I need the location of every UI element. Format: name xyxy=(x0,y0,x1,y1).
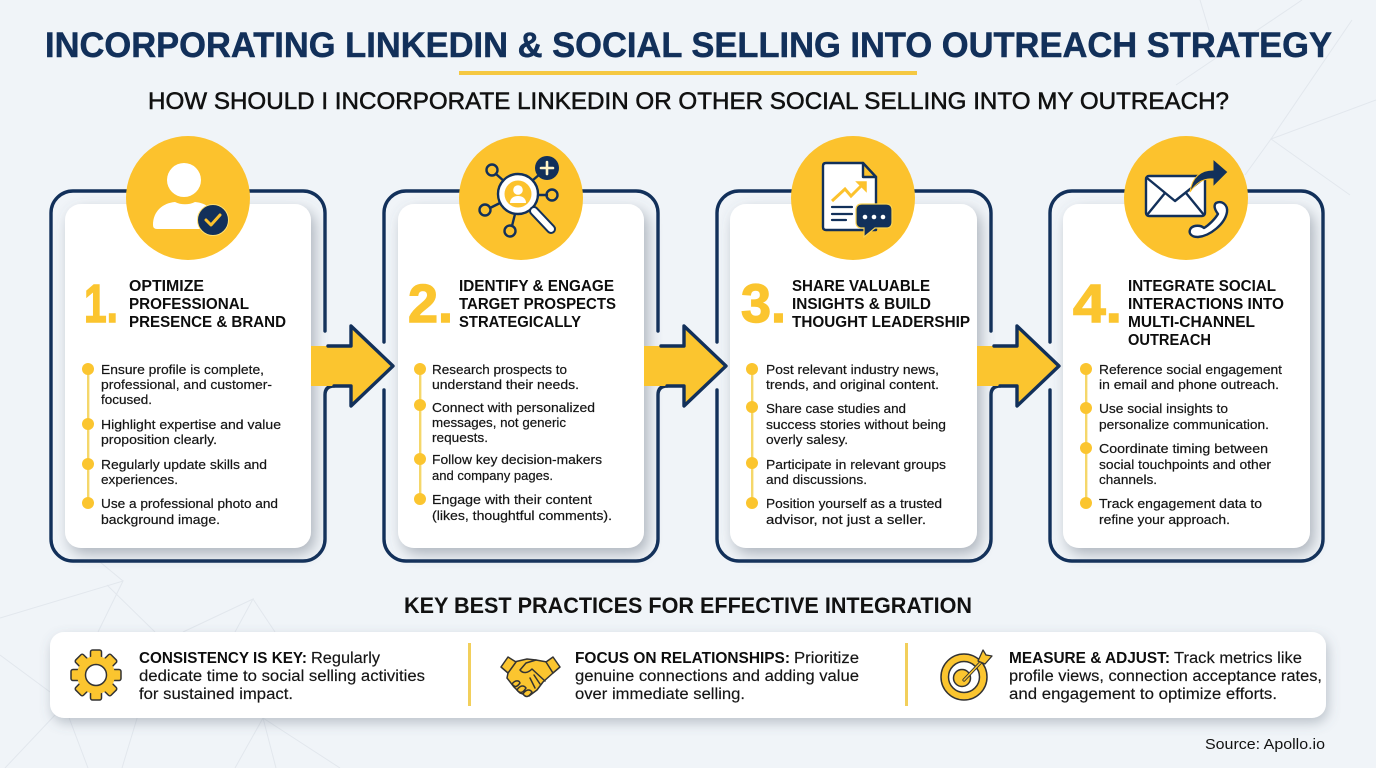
bullets 4: personalize communication. xyxy=(1099,417,1269,432)
bullets 4: Track engagement data to xyxy=(1099,496,1262,511)
practice 1 text: dedicate time to social selling activities xyxy=(139,668,425,685)
number 3: 3. xyxy=(741,274,786,334)
bullets 2: (likes, thoughtful comments). xyxy=(432,508,612,523)
bullets 1: background image. xyxy=(101,512,220,527)
divider 2 xyxy=(905,643,908,706)
practice 3 text: Track metrics like xyxy=(1174,650,1302,667)
bullets 1: Highlight expertise and value xyxy=(101,417,281,432)
practice 1 text xyxy=(139,650,425,703)
bullets 3 xyxy=(766,362,946,527)
bullets 2: understand their needs. xyxy=(432,377,579,392)
icon: target with dart xyxy=(941,650,992,700)
bullets 3: Post relevant industry news, xyxy=(766,362,939,377)
number 4: 4. xyxy=(1073,274,1122,334)
heading 2: IDENTIFY & ENGAGE xyxy=(459,278,614,295)
section heading: best practices: KEY BEST PRACTICES FOR EFFECTIVE INTEGRATION xyxy=(404,593,972,618)
step 1 card xyxy=(65,204,311,548)
title: INCORPORATING LINKEDIN & SOCIAL SELLING INTO OUTREACH STRATEGY xyxy=(45,25,1332,65)
bullet timeline 1 xyxy=(82,363,94,509)
practice 2 text xyxy=(575,650,859,703)
heading 4: MULTI-CHANNEL xyxy=(1128,314,1255,331)
practice 3 text: MEASURE & ADJUST: xyxy=(1009,650,1170,667)
icon: gear xyxy=(71,650,121,700)
panel: step 2 identify prospects xyxy=(384,136,726,561)
panel: step 4 integrate social xyxy=(1050,136,1323,561)
step 2 card xyxy=(398,204,644,548)
practice 1 text: CONSISTENCY IS KEY: xyxy=(139,650,307,667)
bullets 3: advisor, not just a seller. xyxy=(766,512,926,527)
heading 4 xyxy=(1128,278,1284,349)
bullets 2: and company pages. xyxy=(432,468,553,483)
bullets 4 xyxy=(1099,362,1282,527)
bullet timeline 4 xyxy=(1080,363,1092,509)
number 2: 2. xyxy=(408,274,453,334)
heading 2 xyxy=(459,278,616,331)
practice 3 text: profile views, connection acceptance rates, xyxy=(1009,668,1322,685)
practice 2 text: genuine connections and adding value xyxy=(575,668,859,685)
bullet timeline 2 xyxy=(414,363,426,505)
bullets 2: Follow key decision-makers xyxy=(432,452,602,467)
bullets 3: Position yourself as a trusted xyxy=(766,496,942,511)
bullets 4: in email and phone outreach. xyxy=(1099,377,1279,392)
bullets 1: Ensure profile is complete, xyxy=(101,362,264,377)
arrow: step 1 to 2 xyxy=(311,326,393,406)
bullets 4: channels. xyxy=(1099,472,1157,487)
bullets 3: Participate in relevant groups xyxy=(766,457,946,472)
arrow: step 2 to 3 xyxy=(644,326,726,406)
heading 4: INTERACTIONS INTO xyxy=(1128,296,1284,313)
number 1: 1. xyxy=(84,274,118,334)
step 1 frame xyxy=(51,191,334,561)
step 4 frame xyxy=(1050,191,1323,561)
practice 3 text xyxy=(1009,650,1322,703)
bullets 3: overly salesy. xyxy=(766,432,848,447)
subtitle question: HOW SHOULD I INCORPORATE LINKEDIN OR OTHER SOCIAL SELLING INTO MY OUTREACH? xyxy=(148,88,1229,115)
practice 2 text: FOCUS ON RELATIONSHIPS: xyxy=(575,650,790,667)
bullets 2: requests. xyxy=(432,430,488,445)
bullets 3: trends, and original content. xyxy=(766,377,939,392)
bullets 4: social touchpoints and other xyxy=(1099,457,1272,472)
step 3 frame xyxy=(717,191,1000,561)
heading 1 xyxy=(129,278,286,331)
step 4 card xyxy=(1063,204,1310,548)
bullet timeline 3 xyxy=(746,363,758,509)
heading 3: INSIGHTS & BUILD xyxy=(792,296,931,313)
bullets 2: Engage with their content xyxy=(432,492,592,507)
practice 2 text: Prioritize xyxy=(794,650,859,667)
bullets 2: messages, not generic xyxy=(432,415,566,430)
icon: prospect search network xyxy=(459,136,583,260)
practice 3 text: and engagement to optimize efforts. xyxy=(1009,686,1277,703)
heading 1: OPTIMIZE xyxy=(129,278,204,295)
bullets 1: experiences. xyxy=(101,472,178,487)
heading 3: THOUGHT LEADERSHIP xyxy=(792,314,970,331)
source credit: Source: Apollo.io xyxy=(1205,736,1325,753)
panel: step 3 share insights xyxy=(717,136,1059,561)
panel: best practices bar xyxy=(50,632,1326,718)
panel: step 1 optimize presence xyxy=(51,136,393,561)
bullets 3: Share case studies and xyxy=(766,401,906,416)
bar background xyxy=(50,632,1326,718)
heading 4: OUTREACH xyxy=(1128,332,1211,349)
bullets 1 xyxy=(101,362,281,527)
icon: profile with check xyxy=(126,136,250,260)
bullets 2: Research prospects to xyxy=(432,362,567,377)
bullets 1: professional, and customer- xyxy=(101,377,272,392)
heading 2: STRATEGICALLY xyxy=(459,314,581,331)
bullets 1: Use a professional photo and xyxy=(101,496,278,511)
icon: document with chart and chat xyxy=(791,136,915,260)
step 3 card xyxy=(730,204,977,548)
arrow: step 3 to 4 xyxy=(977,326,1059,406)
bullets 1: Regularly update skills and xyxy=(101,457,267,472)
icon: handshake xyxy=(501,657,560,696)
bullets 3: success stories without being xyxy=(766,417,946,432)
title underline xyxy=(459,71,917,75)
step 2 frame xyxy=(384,191,667,561)
icon: email, share and phone xyxy=(1124,136,1248,260)
heading 1: PROFESSIONAL xyxy=(129,296,249,313)
heading 1: PRESENCE & BRAND xyxy=(129,314,286,331)
practice 2 text: over immediate selling. xyxy=(575,686,745,703)
heading 2: TARGET PROSPECTS xyxy=(459,296,616,313)
divider 1 xyxy=(468,643,471,706)
bullets 4: Coordinate timing between xyxy=(1099,441,1268,456)
heading 3 xyxy=(792,278,970,331)
bullets 3: and discussions. xyxy=(766,472,867,487)
bullets 2 xyxy=(432,362,612,523)
practice 1 text: Regularly xyxy=(311,650,380,667)
heading 4: INTEGRATE SOCIAL xyxy=(1128,278,1276,295)
bullets 1: proposition clearly. xyxy=(101,432,217,447)
practice 1 text: for sustained impact. xyxy=(139,686,293,703)
bullets 1: focused. xyxy=(101,392,152,407)
bullets 4: refine your approach. xyxy=(1099,512,1230,527)
heading 3: SHARE VALUABLE xyxy=(792,278,930,295)
bullets 4: Reference social engagement xyxy=(1099,362,1282,377)
bullets 4: Use social insights to xyxy=(1099,401,1228,416)
bullets 2: Connect with personalized xyxy=(432,400,595,415)
